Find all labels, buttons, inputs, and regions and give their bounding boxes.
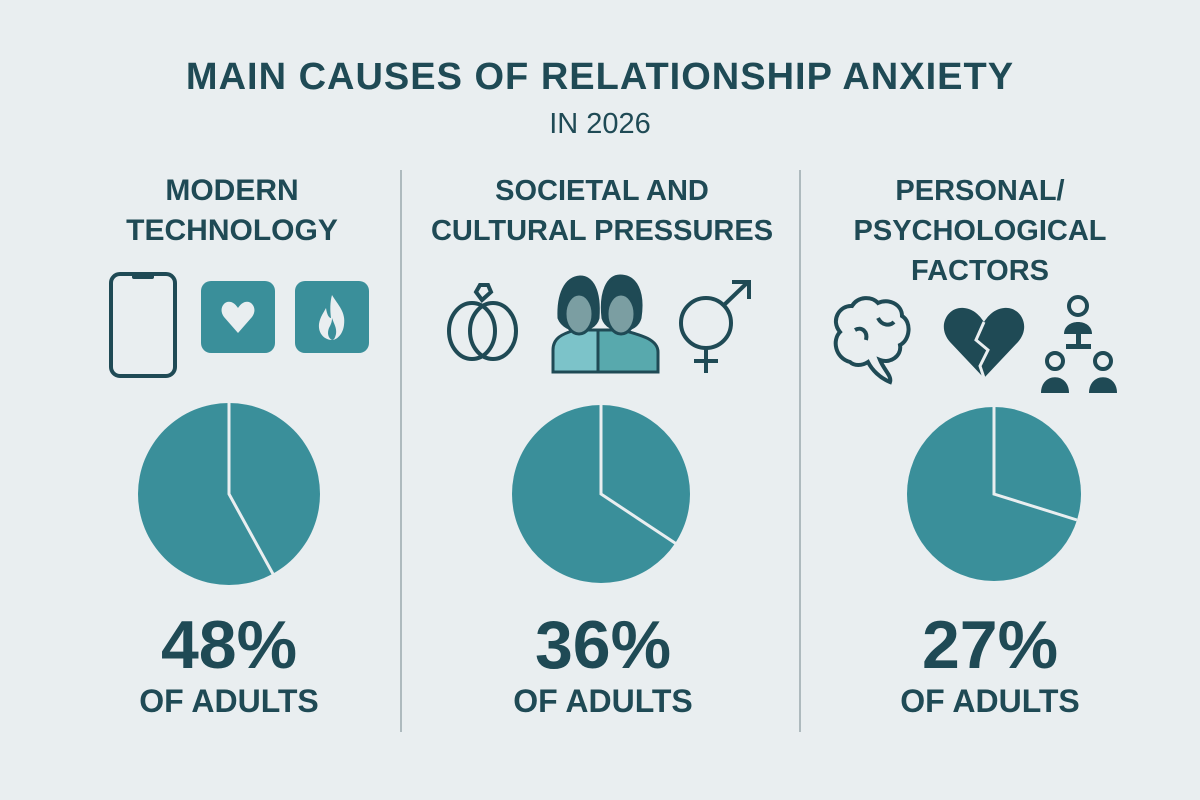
- heading: modern technology: MODERN: [165, 174, 299, 207]
- icon: broken heart: [944, 308, 1024, 378]
- panel: personal/psychological factors: [836, 175, 1117, 719]
- stat: 36%: OF ADULTS: [513, 683, 693, 719]
- pie chart: 36%: [512, 405, 690, 583]
- panel: modern technology: [111, 174, 369, 719]
- stat: 48%: 48%: [161, 607, 297, 683]
- title: [186, 56, 1014, 140]
- icon: couple: [553, 276, 658, 372]
- stat: 48%: [139, 607, 319, 719]
- panel: societal and cultural pressures: [431, 175, 773, 719]
- stat: 36%: 36%: [535, 607, 671, 683]
- icon: phone: [111, 274, 175, 376]
- icon: gender symbol: [681, 282, 749, 373]
- pie chart: 27%: [907, 407, 1081, 581]
- heading: societal: SOCIETAL AND: [495, 175, 709, 207]
- stat: 27%: OF ADULTS: [900, 683, 1080, 719]
- stat: 36%: [513, 607, 693, 719]
- icon: rings: [449, 285, 516, 359]
- icon: heart app: [201, 281, 275, 353]
- stat: 27%: [900, 607, 1080, 719]
- heading: modern technology: TECHNOLOGY: [126, 214, 338, 247]
- pie chart: 48%: [138, 403, 320, 585]
- stat: 27%: 27%: [922, 607, 1058, 683]
- icon: people hierarchy: [1041, 297, 1117, 393]
- icon: flame app: [295, 281, 369, 353]
- heading: personal: FACTORS: [911, 255, 1049, 287]
- heading: personal: PERSONAL/: [895, 175, 1065, 207]
- icon: brain: [836, 298, 909, 382]
- title: IN 2026: [549, 108, 651, 140]
- title: MAIN CAUSES OF RELATIONSHIP ANXIETY: [186, 56, 1014, 98]
- stat: 48%: OF ADULTS: [139, 683, 319, 719]
- heading: personal: PSYCHOLOGICAL: [854, 215, 1106, 247]
- heading: societal: CULTURAL PRESSURES: [431, 215, 773, 247]
